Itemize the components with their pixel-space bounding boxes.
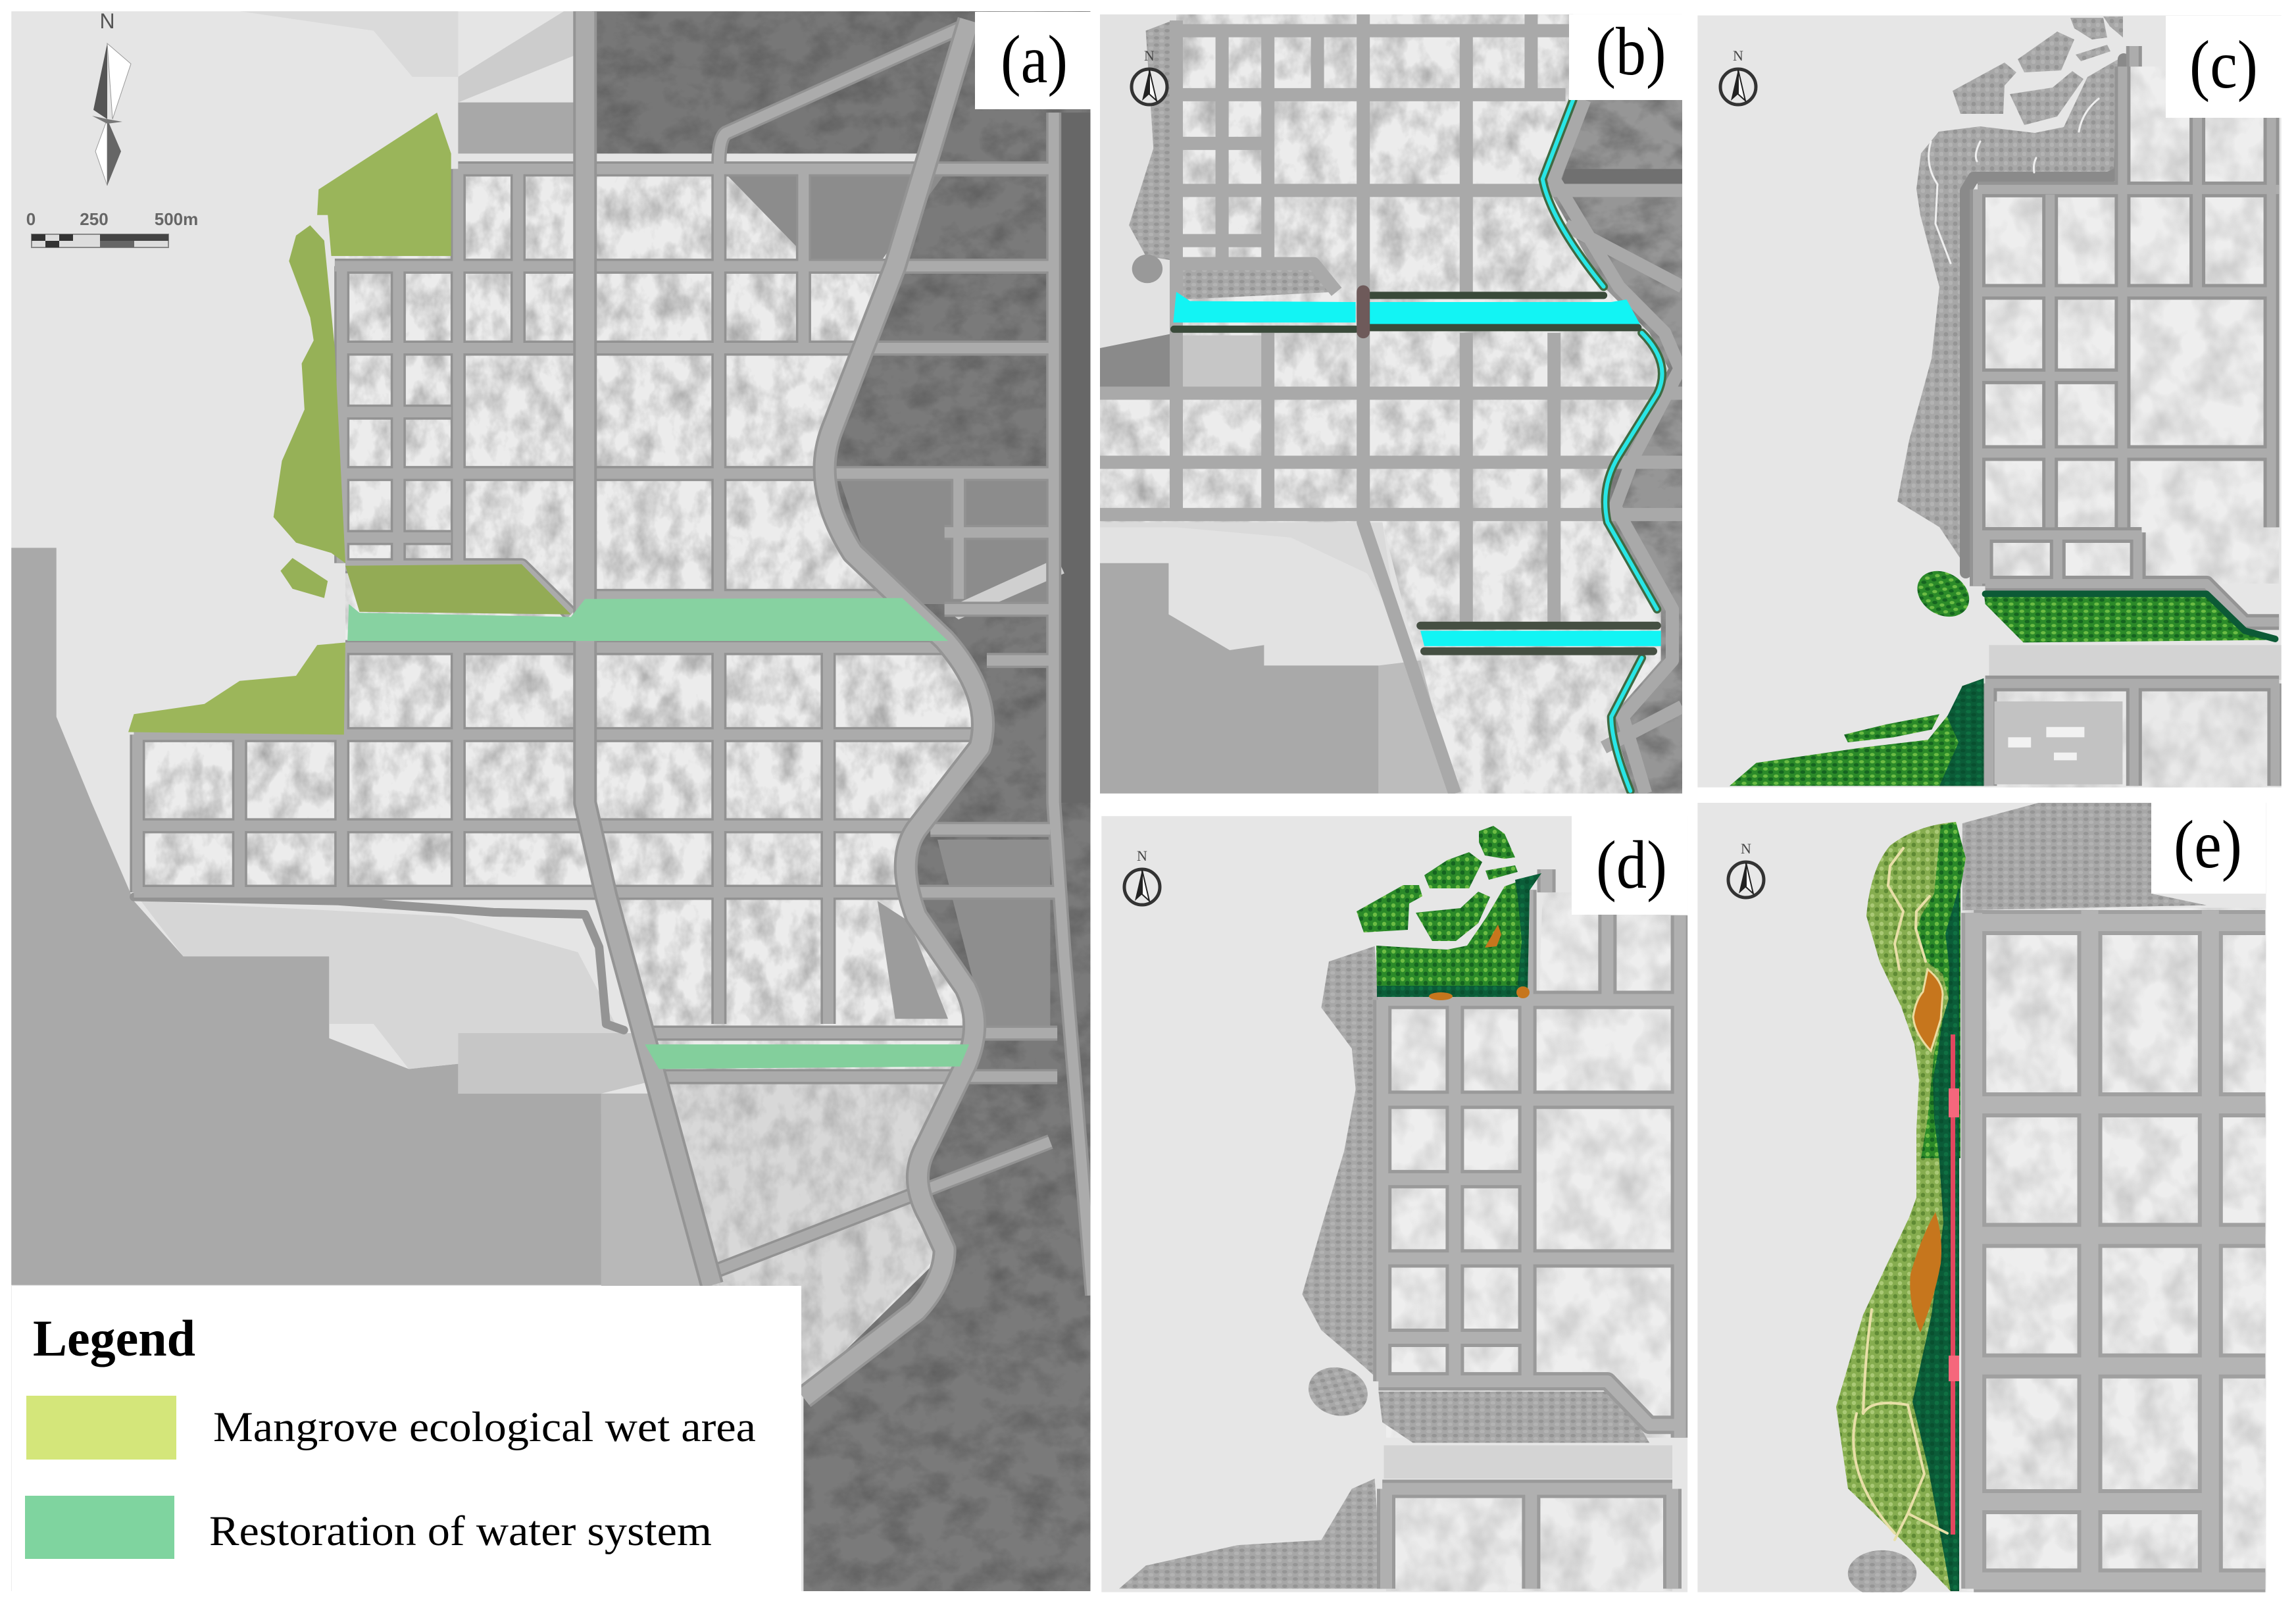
planting: green south mass — [1730, 678, 1984, 786]
label (b) — [1569, 14, 1685, 100]
planting: green islets — [1357, 826, 1518, 941]
icon: north compass c — [1720, 47, 1756, 105]
label (c) — [2166, 16, 2282, 118]
planting: green island — [1909, 566, 1978, 622]
zone: mangrove west shore — [274, 225, 345, 563]
zone: mangrove island — [280, 558, 328, 598]
channel: curved river — [1543, 100, 1662, 791]
planting: dark edge — [1377, 873, 1541, 997]
legend: Legend — [33, 1310, 195, 1367]
grey islet 3 — [2076, 45, 2110, 61]
red promenade — [1949, 1034, 1959, 1535]
planting: grey island — [1848, 1550, 1916, 1596]
orange wetland south — [1910, 1212, 1941, 1333]
label (a): (a) — [1001, 22, 1068, 97]
icon: north compass b — [1132, 47, 1167, 105]
planting: grey island — [1301, 1363, 1376, 1420]
map (b) base, roads and channels — [1100, 14, 1682, 794]
legend swatch: water — [25, 1496, 174, 1559]
icon: north compass c: N — [1733, 47, 1743, 64]
scale bar: 250 — [80, 209, 109, 229]
orange wetlands — [1429, 925, 1530, 1000]
zone: mangrove central — [345, 564, 571, 615]
planting: grey central band — [1378, 1392, 1649, 1442]
zone: mangrove south — [128, 642, 345, 734]
panel: (c) mangrove phase map — [1697, 15, 2285, 788]
planting: grey trees north — [1962, 803, 2207, 910]
label (c): (c) — [2189, 27, 2258, 103]
panel: (d) mangrove phase map — [1100, 815, 1687, 1592]
map (e) base, grey planting and roads — [1697, 803, 2266, 1596]
label (b): (b) — [1596, 14, 1666, 89]
white footpaths in trees — [1929, 99, 2099, 263]
dark tree edge along road — [1966, 59, 2124, 572]
map (a) base layers, roads and zones — [11, 11, 1093, 1591]
panel: (e) mangrove phase map — [1697, 803, 2266, 1596]
zone: mangrove north — [317, 113, 451, 256]
legend — [12, 1286, 801, 1593]
grey islet 4 — [2018, 32, 2074, 72]
planting: dark edge — [1985, 594, 2275, 639]
planting: green main mass — [1376, 873, 1541, 997]
scale bar: 500m — [155, 209, 198, 229]
channel: south restored — [1420, 626, 1661, 651]
icon: north compass d — [1124, 848, 1160, 905]
label (a) — [975, 12, 1092, 109]
grey islet 5 — [1953, 63, 2016, 114]
icon: north arrow — [92, 43, 131, 186]
panel: (b) water system detail — [1100, 14, 1685, 794]
map (c) base — [1697, 15, 2285, 788]
grey islet 1 — [2070, 18, 2107, 39]
icon: north compass d: N — [1137, 848, 1147, 864]
zone: restored water channel south — [645, 1044, 969, 1069]
planting: grey south mass — [1119, 1479, 1382, 1589]
map (d) base, grey planting and roads — [1100, 815, 1687, 1592]
grey islet 6 — [2010, 71, 2084, 125]
scale bar — [26, 209, 198, 247]
planting: grey shoreline trees — [1302, 946, 1378, 1376]
legend text: water: Restoration of water system — [209, 1508, 712, 1555]
zone: restored water channel north — [347, 598, 948, 641]
scale bar: 0 — [26, 209, 36, 229]
planting: small patches — [1844, 714, 1939, 742]
icon: north compass b: N — [1144, 47, 1155, 64]
label (e): (e) — [2174, 807, 2242, 882]
grey islet 2 — [2103, 16, 2123, 38]
planting: dark south edge — [1939, 678, 1984, 786]
planting: dark green strip — [1912, 888, 1959, 1591]
planting: bright green band — [1916, 822, 1966, 1158]
panel: (a) master plan map — [11, 9, 1093, 1593]
legend text: mangrove: Mangrove ecological wet area — [213, 1404, 756, 1451]
planting: green central band — [1984, 592, 2275, 642]
grey shoreline — [1897, 53, 2130, 578]
planting: grey trees — [1897, 16, 2130, 578]
icon: north compass e: N — [1741, 840, 1751, 857]
legend swatch: mangrove — [26, 1396, 176, 1460]
icon: north compass e — [1728, 840, 1764, 898]
text: north letter: N — [99, 9, 115, 33]
label (d) — [1572, 816, 1687, 915]
channel: north restored — [1173, 292, 1642, 332]
label (d): (d) — [1596, 827, 1667, 903]
label (e) — [2151, 803, 2266, 894]
planting: olive shore body — [1836, 822, 1966, 1591]
residential block — [1995, 701, 2122, 784]
orange wetland north — [1913, 969, 1943, 1051]
cream footpaths — [1853, 848, 1947, 1540]
map (c) roads and green planting — [1730, 46, 2279, 786]
